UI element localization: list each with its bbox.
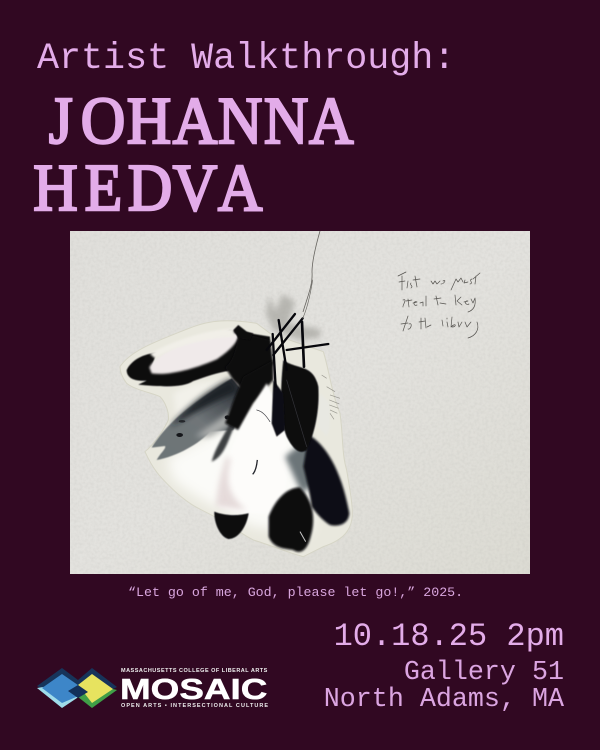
central dark feather: [272, 360, 319, 452]
title: artist name: HEDVA: [33, 151, 262, 225]
handwritten note: [398, 272, 480, 338]
heading: event type: Artist Walkthrough:: [37, 38, 455, 80]
feather 1: pale with dark edge: [127, 325, 273, 390]
hanging wire: [303, 231, 320, 312]
wispy barbs: [322, 375, 340, 419]
logo tagline: OPEN ARTS • INTERSECTIONAL CULTURE: [121, 703, 269, 709]
caption: “Let go of me, God, please let go!,” 2025.: [128, 585, 463, 600]
title: artist name: [33, 84, 354, 225]
quills: [257, 280, 328, 447]
logo: MOSAIC: [37, 668, 269, 709]
feather 5: right, black: [285, 393, 349, 526]
title: artist name: JOHANNA: [49, 84, 353, 158]
logo wordmark: MOSAIC: [120, 674, 267, 706]
date and time: 10.18.25 2pm: [334, 618, 564, 655]
artwork image: feathers on paper: [70, 231, 530, 574]
white glow: [167, 400, 323, 533]
feather 3: white with black tip: [214, 383, 287, 539]
translucent film backing: [120, 321, 352, 557]
feather 4: bottom, black: [269, 487, 313, 552]
dark barbs down feather 2: [225, 360, 273, 430]
feathers: [120, 280, 352, 557]
blurred shadows: [266, 294, 321, 340]
venue: Gallery 51 North Adams, MA: [324, 658, 564, 715]
feather 2: grey: [152, 378, 247, 462]
logo icon: overlapping diamonds: [37, 668, 117, 708]
logo top line: MASSACHUSETTS COLLEGE OF LIBERAL ARTS: [121, 668, 268, 674]
